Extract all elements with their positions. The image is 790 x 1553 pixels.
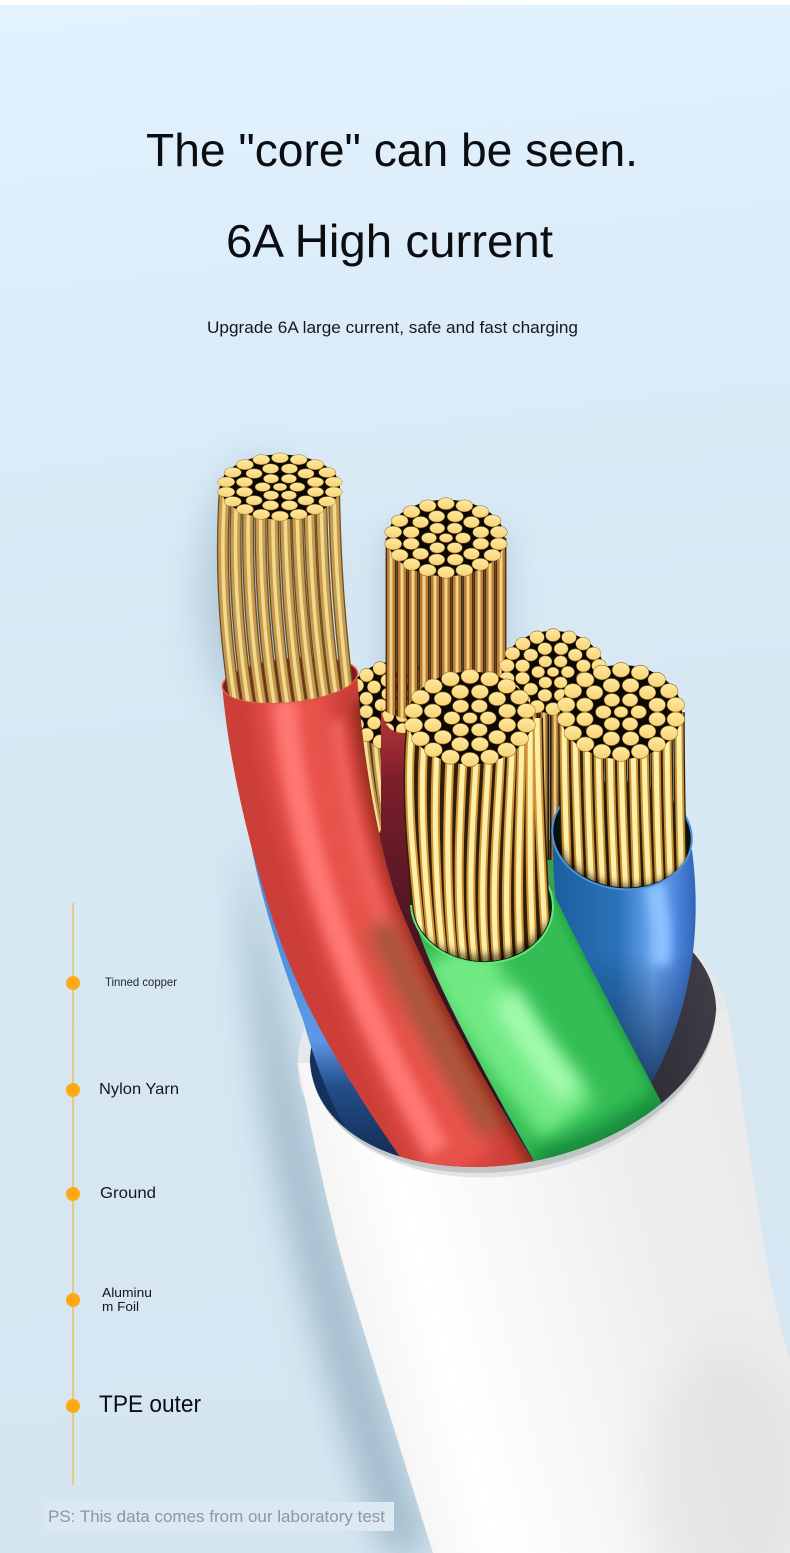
legend: Ground: Ground [100, 1185, 156, 1202]
copper core: red wire [218, 453, 351, 720]
legend: Aluminum Foil: m Foil [102, 1299, 139, 1314]
cable soft shadow [200, 460, 505, 1553]
cable illustration [200, 453, 790, 1553]
copper core: back right wire [500, 629, 606, 860]
heading: 6A High current: 6A High current [226, 215, 553, 267]
legend: TPE outer: TPE outer [99, 1391, 201, 1418]
copper core: right wire [553, 663, 692, 895]
dark red wire sheath [375, 700, 540, 1110]
green wire sheath (front) [410, 884, 662, 1161]
blue sheath opening [545, 772, 699, 898]
footnote [45, 1502, 394, 1531]
red wire sheath [222, 656, 534, 1168]
legend: Nylon Yarn: Nylon Yarn [99, 1081, 179, 1098]
legend: Tinned copper: Tinned copper [105, 975, 177, 989]
footnote: PS: This data comes from our laboratory test [48, 1507, 385, 1526]
title: The "core" can be seen. [146, 124, 638, 176]
green wire sheath (rear) [530, 840, 585, 965]
copper core: back centre wire [385, 498, 507, 730]
legend: Aluminum Foil [66, 1285, 152, 1314]
legend: Ground [66, 1185, 156, 1202]
legend: Aluminum Foil: Aluminu [102, 1285, 152, 1300]
white TPE outer sheath [298, 1011, 790, 1553]
copper core: front twisted wire [405, 669, 550, 970]
legend: Tinned copper [66, 975, 177, 990]
timeline line [72, 903, 74, 1485]
blue wire sheath (left, behind) [247, 820, 450, 1178]
blue wire sheath (right) [545, 772, 699, 1088]
sheath inner lip [310, 1011, 716, 1173]
legend: Nylon Yarn [66, 1081, 179, 1098]
outer sheath interior [284, 865, 742, 1209]
red sheath opening [222, 656, 358, 704]
legend timeline [66, 903, 201, 1485]
top white strip [0, 0, 790, 5]
subtitle: Upgrade 6A large current, safe and fast charging [207, 318, 578, 337]
outer sheath back rim [298, 952, 728, 1100]
rear wire: tinned copper strands [345, 659, 445, 840]
sheath outer lip [310, 1011, 716, 1177]
green sheath opening [410, 884, 554, 964]
